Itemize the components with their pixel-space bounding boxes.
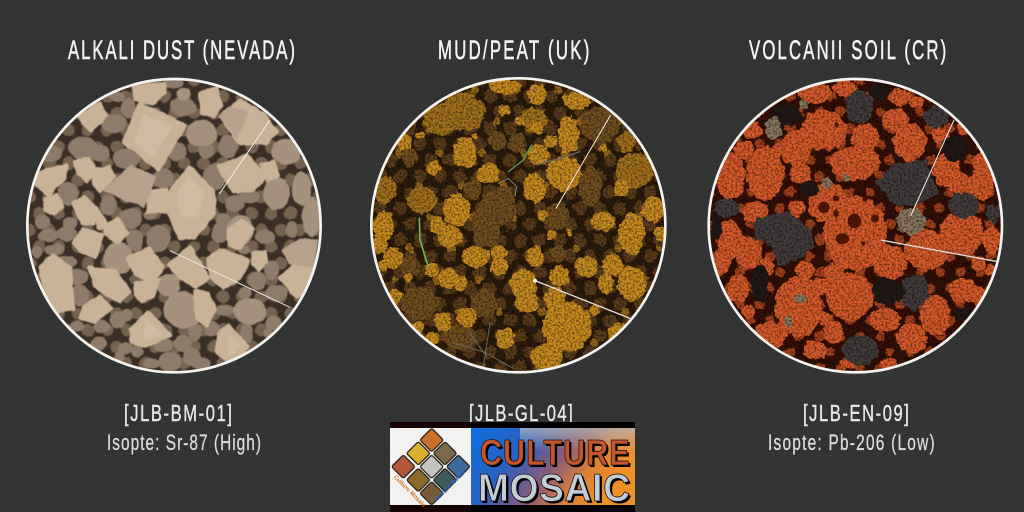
callout line: upper (556, 115, 611, 208)
grass strands (419, 145, 580, 368)
sample id: JLB-GL-04: [JLB-GL-04] (469, 401, 573, 427)
callout line: upper (911, 120, 954, 216)
logo wordmark: mosaic: MOSAIC (480, 469, 632, 512)
heading: volcanic soil: VOLCANII SOIL (CR) (749, 35, 946, 65)
panel: volcanic soil sample circle (700, 70, 1010, 380)
logo tiles: Culture Mosaic (392, 475, 427, 510)
pore holes in scoria (818, 122, 879, 245)
isotope: Sr-87: Isopte: Sr-87 (High) (107, 431, 261, 456)
panel: mud peat sample circle (360, 70, 670, 380)
heading: mud peat: MUD/PEAT (UK) (438, 35, 589, 65)
logo: culture mosaic (390, 422, 635, 512)
callout line: lower (170, 251, 290, 307)
panel: alkali dust sample circle (20, 70, 330, 380)
logo tiles (392, 428, 470, 510)
logo tiles: Culture Mosaic (434, 468, 469, 503)
logo wordmark: culture: CULTURE (480, 434, 630, 474)
sample id: JLB-BM-01: [JLB-BM-01] (124, 401, 232, 427)
ring (709, 79, 1002, 372)
heading: alkali dust: ALKALI DUST (NEVADA) (68, 35, 295, 65)
isotope: Pb-206: Isopte: Pb-206 (Low) (768, 431, 935, 456)
ring (371, 78, 665, 372)
sample id: JLB-EN-09: [JLB-EN-09] (803, 401, 909, 427)
logo wordmark: culture: CULTURE (482, 436, 632, 476)
callout line: lower (533, 279, 630, 318)
callout line: upper (219, 120, 270, 194)
logo wordmark: mosaic: MOSAIC (478, 467, 630, 510)
ring (27, 79, 321, 372)
callout line: lower (881, 240, 996, 261)
